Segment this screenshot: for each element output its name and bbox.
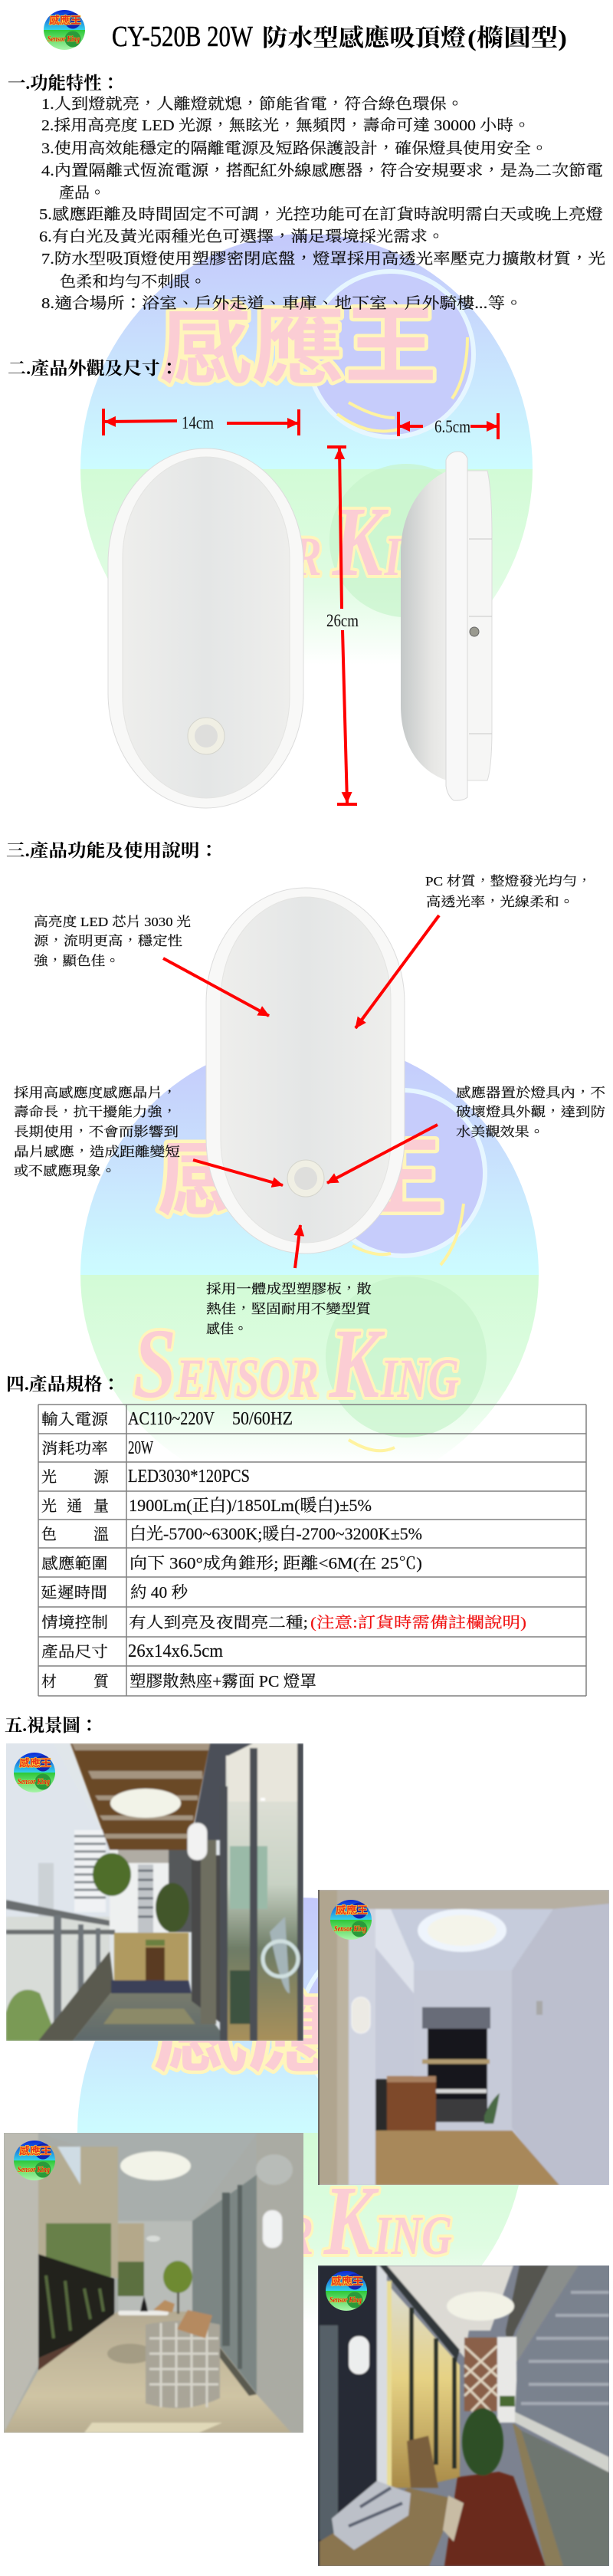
callout: sensor chip: 晶片感應，造成距離變短 (14, 1145, 180, 1159)
logo on photo 2 (330, 1900, 372, 1940)
feature list: 2.採用高亮度 LED 光源，無眩光，無頻閃，壽命可達 30000 小時。 (41, 117, 530, 134)
watermark: top: SENSOR KING (134, 487, 464, 597)
spec table: 26x14x6.5cm (128, 1641, 223, 1661)
callout: plastic plate: 熱佳，堅固耐用不變型質 (206, 1302, 372, 1316)
photo: balcony with lattice chair (4, 2133, 303, 2433)
feature list: 產品。 (59, 184, 105, 202)
brand logo: 感應王 (49, 15, 81, 26)
callout: built-in sensor: 水美觀效果。 (456, 1125, 544, 1139)
callout: sensor chip: 壽命長，抗干擾能力強， (14, 1105, 177, 1119)
watermark: bottom: 感應王 (153, 1986, 437, 2082)
logo on photo 1 (14, 1753, 55, 1792)
heading: section 4: 四.產品規格： (6, 1374, 120, 1394)
spec table: 白光-5700~6300K;暖白-2700~3200K±5% (129, 1524, 422, 1543)
feature list (39, 95, 605, 312)
logo on photo 4: 感應王 (331, 2275, 363, 2287)
logo on photo 4 (326, 2271, 367, 2311)
logo on photo 1: 感應王 (19, 1757, 51, 1769)
spec table: 材 (41, 1673, 57, 1691)
title: (橢圓型) (467, 25, 567, 51)
spec table: 塑膠散熱座+霧面 PC 燈罩 (129, 1672, 316, 1691)
spec table: 約 40 秒 (130, 1583, 188, 1602)
watermark: top (80, 234, 533, 699)
logo on photo 3: Sensor King (18, 2166, 50, 2174)
callout: sensor chip: 或不感應現象。 (14, 1164, 116, 1178)
spec table: 消耗功率 (41, 1440, 108, 1457)
title: 防水型感應吸頂燈 (262, 25, 466, 51)
brand logo: Sensor King (48, 35, 80, 44)
callout: plastic plate: 感佳。 (206, 1322, 247, 1336)
lamp side view (401, 452, 492, 800)
spec table: 情境控制 (41, 1614, 108, 1631)
callout: LED chip (34, 915, 191, 968)
logo on photo 3: 感應王 (19, 2145, 51, 2157)
spec table: 光 (41, 1497, 57, 1515)
dimension: height 26cm: 26cm (326, 611, 359, 630)
spec table: 20W (128, 1438, 153, 1458)
spec table: 延遲時間 (41, 1584, 107, 1602)
spec table: 1900Lm(正白)/1850Lm(暖白)±5% (129, 1496, 372, 1515)
logo on photo 1: Sensor King (18, 1778, 50, 1786)
callout arrows (163, 915, 439, 1268)
spec table: 色 (41, 1526, 57, 1543)
callout: LED chip: 強，顯色佳。 (34, 954, 120, 968)
watermark: middle (80, 1040, 539, 1497)
feature list: 6.有白光及黃光兩種光色可選擇，滿足環境採光需求。 (39, 228, 444, 245)
dimension: width 14cm: 14cm (182, 413, 214, 432)
spec table: 輸入電源 (41, 1411, 109, 1428)
feature list: 4.內置隔離式恆流電源，搭配紅外線感應器，符合安規要求，是為二次節電 (41, 162, 603, 179)
lamp annotated view (206, 888, 405, 1254)
logo on photo 3 (14, 2141, 55, 2180)
callout: plastic plate: 採用一體成型塑膠板，散 (206, 1282, 372, 1296)
feature list: 8.適合場所：浴室、戶外走道、車庫、地下室、戶外騎樓...等。 (41, 294, 523, 312)
photo: white room with window (318, 1890, 609, 2185)
heading: section 2: 二.產品外觀及尺寸： (8, 358, 179, 378)
dimension: height 26cm (326, 447, 359, 804)
spec table: 通 (67, 1497, 82, 1515)
callout: sensor chip (14, 1086, 180, 1178)
spec table: LED3030*120PCS (128, 1467, 250, 1487)
callout: PC material: PC 材質，整燈發光均勻， (425, 874, 592, 889)
photo: balcony with wood ceiling (6, 1743, 303, 2041)
callout: built-in sensor: 感應器置於燈具內，不 (456, 1086, 605, 1100)
callout: LED chip: 高亮度 LED 芯片 3030 光 (34, 915, 191, 929)
spec table: 向下 360°成角錐形; 距離<6M(在 25℃) (129, 1554, 422, 1572)
feature list: 7.防水型吸頂燈使用塑膠密閉底盤，燈罩採用高透光率壓克力擴散材質，光 (41, 250, 605, 268)
logo on photo 4: Sensor King (329, 2296, 362, 2305)
callout: sensor chip: 長期使用，不會而影響到 (14, 1125, 179, 1139)
spec table: 質 (93, 1673, 110, 1691)
feature list: 色柔和均勻不刺眼。 (60, 273, 206, 291)
lamp front view (108, 449, 303, 808)
spec table: 光 (41, 1468, 57, 1486)
title (112, 21, 567, 53)
spec table: 有人到亮及夜間亮二種; (129, 1614, 308, 1631)
title: CY-520B 20W (112, 21, 253, 53)
spec table: 感應範圍 (41, 1555, 108, 1572)
watermark: middle: 感應王 (157, 1130, 444, 1226)
spec table (38, 1405, 586, 1696)
callout: PC material (425, 874, 592, 909)
dimension: depth 6.5cm (398, 412, 498, 439)
heading: section 3: 三.產品功能及使用說明： (6, 840, 218, 860)
watermark: bottom (77, 1898, 525, 2358)
photo: balcony with bench (318, 2266, 609, 2566)
callout: plastic plate (206, 1282, 372, 1336)
logo on photo 2: 感應王 (336, 1904, 368, 1916)
spec table: AC110~220V (128, 1409, 215, 1429)
feature list: 3.使用高效能穩定的隔離電源及短路保護設計，確保燈具使用安全。 (41, 140, 548, 157)
callout: PC material: 高透光率，光線柔和。 (426, 895, 574, 909)
feature list: 5.感應距離及時間固定不可調，光控功能可在訂貨時說明需白天或晚上亮燈 (39, 205, 603, 223)
watermark: middle: SENSOR KING (133, 1309, 459, 1419)
heading: section 1: 一.功能特性： (8, 74, 120, 93)
callout: LED chip: 源，流明更高，穩定性 (34, 934, 182, 948)
logo on photo 2: Sensor King (334, 1925, 366, 1934)
spec table: 產品尺寸 (41, 1643, 108, 1661)
watermark: bottom: SENSOR KING (130, 2166, 452, 2276)
spec table: 源 (93, 1468, 110, 1486)
brand logo (44, 10, 85, 50)
watermark: top: 感應王 (159, 298, 437, 394)
spec table: 溫 (93, 1526, 109, 1543)
dimension: depth 6.5cm: 6.5cm (434, 417, 470, 436)
callout: built-in sensor (456, 1086, 605, 1139)
dimension: width 14cm (103, 409, 299, 435)
heading: section 5: 五.視景圖： (5, 1716, 98, 1735)
feature list: 1.人到燈就亮，人離燈就熄，節能省電，符合綠色環保。 (41, 95, 464, 113)
callout: built-in sensor: 破壞燈具外觀，達到防 (456, 1104, 605, 1119)
spec table: (注意:訂貨時需備註欄說明) (310, 1614, 526, 1631)
callout: sensor chip: 採用高感應度感應晶片， (14, 1086, 177, 1100)
spec table: 量 (93, 1497, 109, 1515)
spec table: 50/60HZ (232, 1409, 293, 1429)
